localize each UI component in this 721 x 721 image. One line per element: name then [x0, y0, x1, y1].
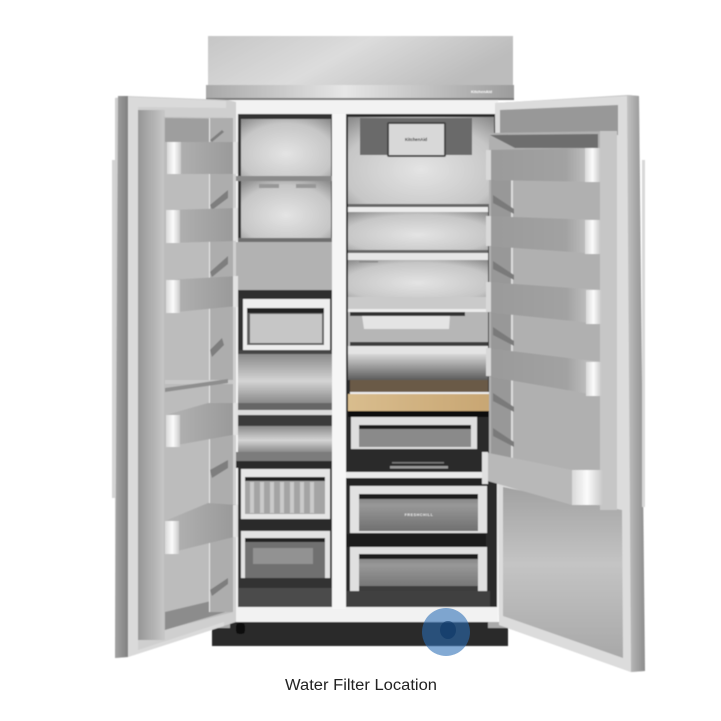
panel: refrigerator compartment: [346, 114, 497, 607]
left door bin 3: [166, 276, 238, 313]
dispenser housing: [360, 118, 472, 157]
door brackets: [210, 130, 228, 596]
left door bin 4: [166, 403, 238, 447]
shelf 2: [348, 253, 488, 260]
water filter location marker: [422, 608, 470, 656]
drawer label: FRESHCHILL: [405, 513, 434, 517]
right door: [482, 95, 645, 672]
shelf 1: [348, 207, 488, 212]
drawer 1: [351, 417, 477, 449]
left door bin 5: [165, 503, 238, 554]
freezer drawer 1: [243, 299, 330, 350]
bottom drawer: [350, 547, 487, 591]
brand badge: KitchenAid: [471, 89, 493, 94]
lower door panel: [503, 487, 623, 658]
top grille panel: [206, 36, 514, 100]
control panel: [346, 449, 486, 472]
freezer basket 2: [241, 531, 330, 578]
door liner: [164, 117, 233, 630]
right door bin 2: [486, 216, 600, 254]
right door bin 1: [486, 148, 600, 182]
door brackets: [493, 195, 514, 447]
left door bin 2: [166, 208, 238, 243]
cabinet frame: [226, 100, 498, 622]
shelf 3 with crisper: [348, 297, 488, 346]
dispenser logo: KitchenAid: [405, 137, 427, 142]
vents: [259, 184, 279, 188]
wire shelf 2: [236, 452, 332, 461]
FreshChill drawer: [350, 486, 487, 533]
left door bin 1: [167, 142, 238, 174]
kick plate: [212, 622, 508, 646]
right door bin 5: [482, 452, 602, 505]
caption: Water Filter Location: [285, 677, 437, 694]
wire shelf 1: [238, 403, 332, 410]
left door: [112, 96, 238, 658]
freezer basket 1: [241, 469, 330, 519]
panel: freezer compartment: [235, 114, 332, 607]
refrigerator: [112, 36, 645, 672]
right door bin 4: [486, 348, 601, 396]
wood drawer: [348, 380, 490, 411]
right door bin 3: [486, 282, 601, 324]
